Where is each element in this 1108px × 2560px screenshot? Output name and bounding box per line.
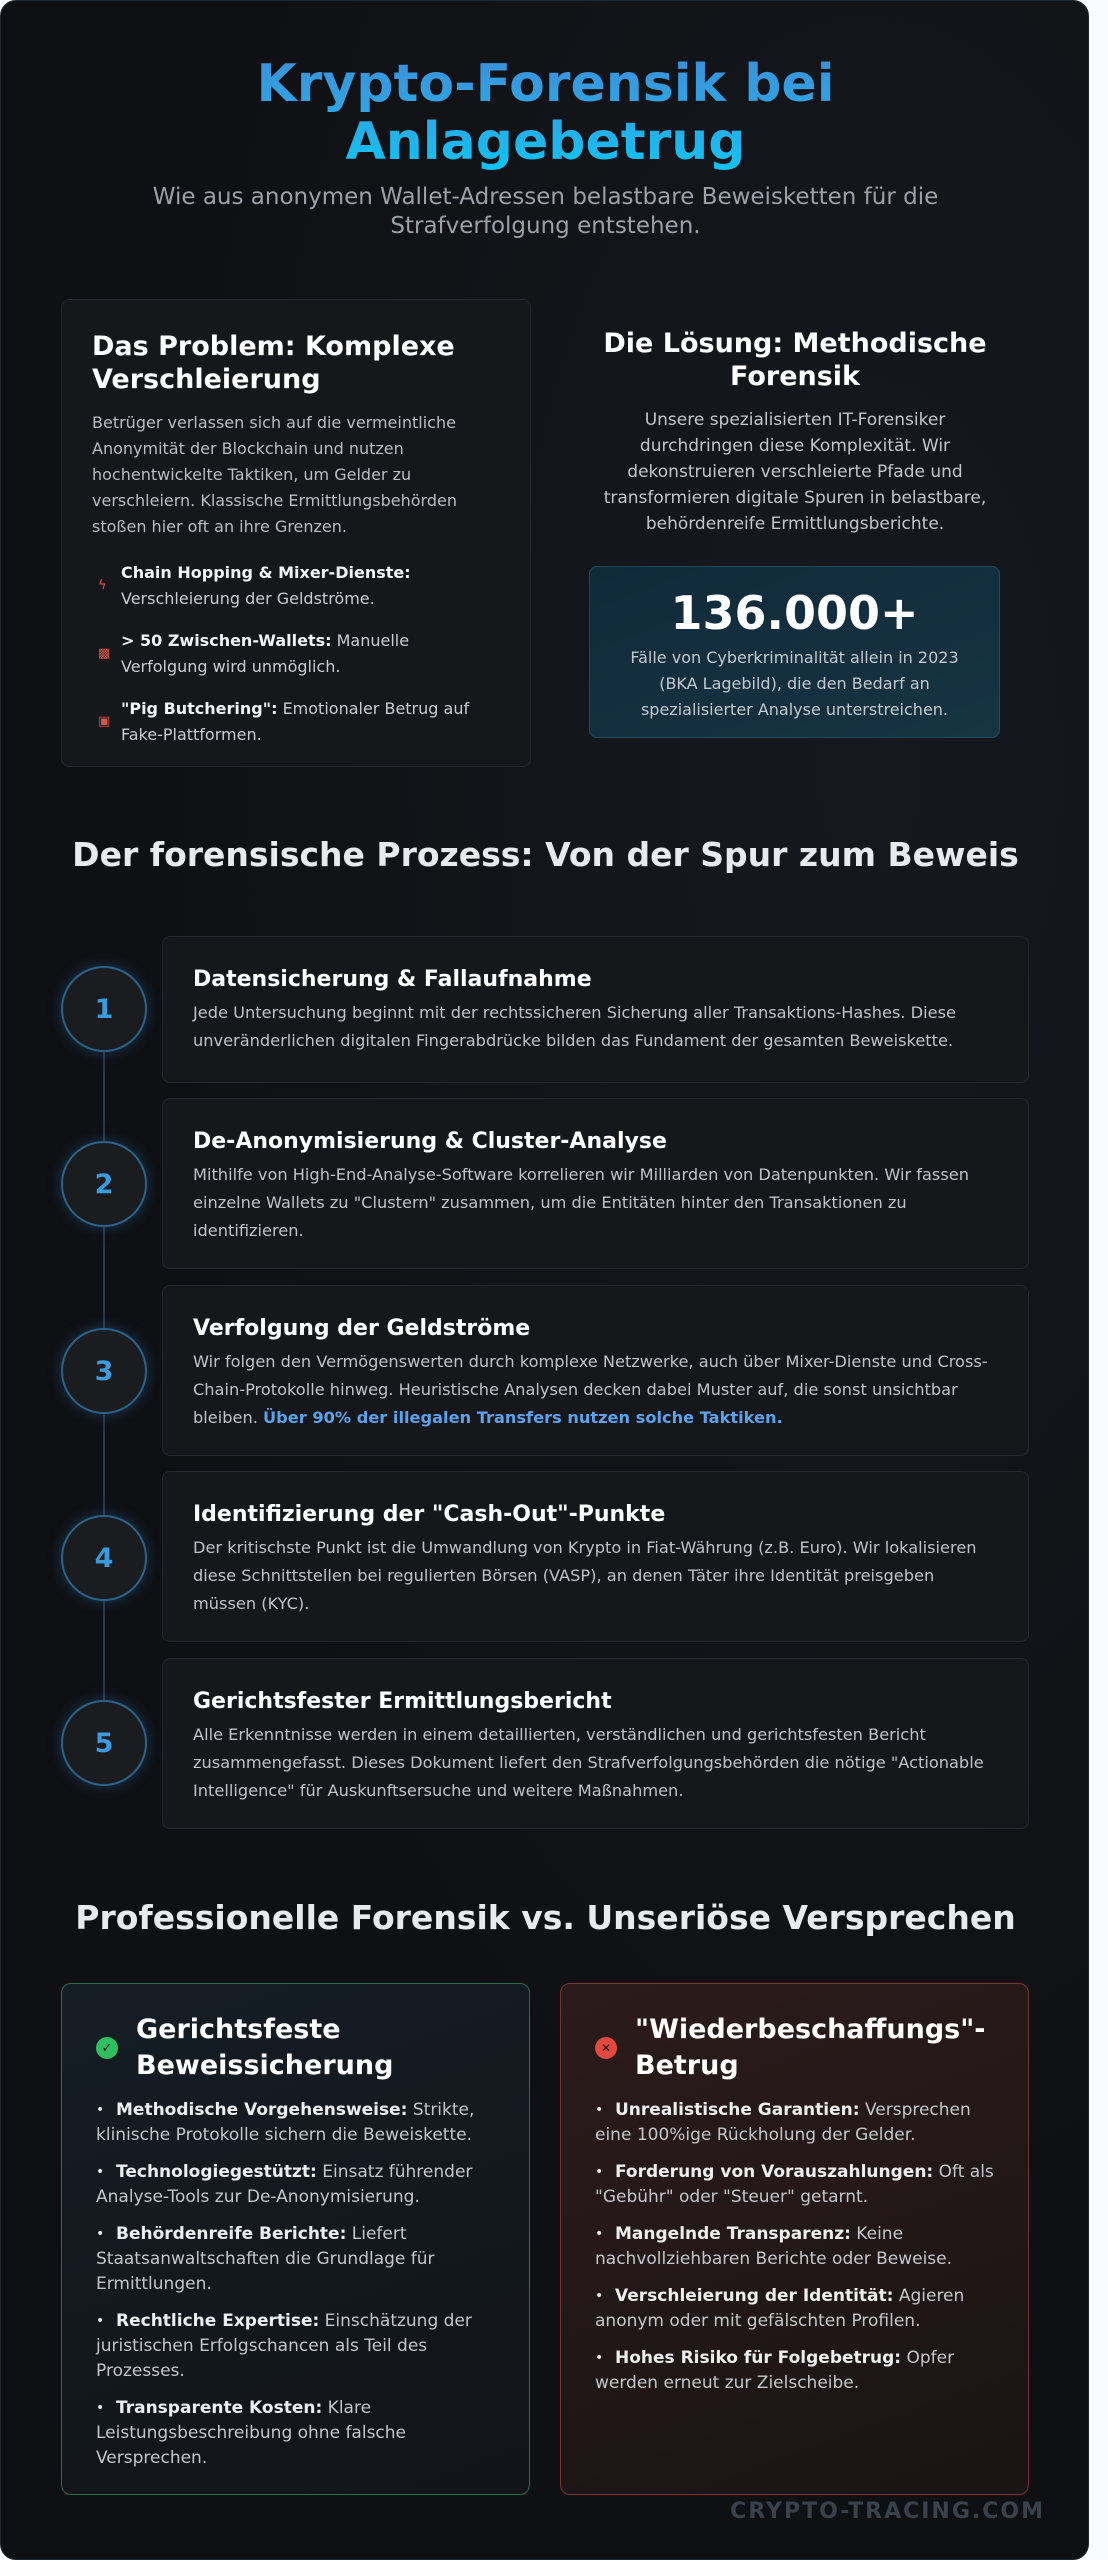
step 5 [54, 1658, 1029, 1829]
circle 1: 1 [95, 994, 113, 1024]
item: chain hopping: ϟ [98, 578, 107, 593]
circle 3: 3 [95, 1356, 113, 1386]
card 4: Identifizierung der "Cash-Out"-Punkte [193, 1502, 665, 1527]
item: chain hopping: Chain Hopping & Mixer-Dienste: Verschleierung der Geldströme. [121, 563, 411, 608]
card 5: Gerichtsfester Ermittlungsbericht [193, 1689, 612, 1714]
professional list: Rechtliche Expertise: Einschätzung der juristischen Erfolgschancen als Teil des Prozesses. [96, 2311, 472, 2381]
title: Anlagebetrug [346, 112, 745, 172]
title: Krypto-Forensik bei [256, 54, 835, 114]
title [1, 55, 1090, 171]
card 1: Jede Untersuchung beginnt mit der rechtssicheren Sicherung aller Transaktions-Hashes. Diese unveränderlichen digitalen Fingerabdrücke bilden das Fundament der gesamten Beweiskette. [193, 1003, 956, 1050]
item: pig butchering: "Pig Butchering": Emotionaler Betrug auf Fake-Plattformen. [121, 699, 469, 744]
card 4: Der kritischste Punkt ist die Umwandlung von Krypto in Fiat-Währung (z.B. Euro). Wir lokalisieren diese Schnittstellen bei regulierten Börsen (VASP), an denen Täter ihre Identität preisgeben müssen (KYC). [193, 1538, 977, 1613]
stat box [589, 566, 1000, 738]
stat number: 136.000+ [670, 586, 919, 640]
panel: professional [61, 1983, 530, 2495]
icon: check [96, 2037, 118, 2059]
panel: solution [603, 328, 987, 534]
card 2: Mithilfe von High-End-Analyse-Software korrelieren wir Milliarden von Datenpunkten. Wir fassen einzelne Wallets zu "Clustern" zusammen, um die Entitäten hinter den Transaktionen zu identifizieren. [193, 1165, 969, 1240]
fraud list: Mangelnde Transparenz: Keine nachvollziehbaren Berichte oder Beweise. [595, 2224, 952, 2269]
step 1 [54, 936, 1029, 1083]
fraud list: Verschleierung der Identität: Agieren anonym oder mit gefälschten Profilen. [595, 2286, 964, 2331]
problem items [98, 563, 470, 744]
professional list: Technologiegestützt: Einsatz führender Analyse-Tools zur De-Anonymisierung. [96, 2162, 472, 2207]
card 3: Verfolgung der Geldströme [193, 1316, 530, 1341]
circle 4: 4 [95, 1542, 113, 1574]
fraud list: Forderung von Vorauszahlungen: Oft als "Gebühr" oder "Steuer" getarnt. [595, 2162, 994, 2207]
heading with check icon: Gerichtsfeste Beweissicherung [136, 2014, 393, 2081]
section heading: comparison: Professionelle Forensik vs. Unseriöse Versprechen [75, 1898, 1016, 1937]
card 5 [162, 1658, 1029, 1829]
timeline line [103, 1011, 105, 1746]
fraud list: Unrealistische Garantien: Versprechen eine 100%ige Rückholung der Gelder. [595, 2100, 971, 2145]
panel: fraud [560, 1983, 1029, 2495]
circle 5: 5 [95, 1728, 113, 1758]
heading with x icon: "Wiederbeschaffungs"-Betrug [635, 2014, 986, 2081]
professional list: Transparente Kosten: Klare Leistungsbeschreibung ohne falsche Versprechen. [96, 2398, 406, 2468]
card 3: Wir folgen den Vermögenswerten durch komplexe Netzwerke, auch über Mixer-Dienste und Cross-Chain-Protokolle hinweg. Heuristische Analysen decken dabei Muster auf, die sonst unsichtbar bleiben. Über 90% der illegalen Transfers nutzen solche Taktiken. [193, 1352, 988, 1427]
card 5: Alle Erkenntnisse werden in einem detaillierten, verständlichen und gerichtsfesten Bericht zusammengefasst. Dieses Dokument liefert den Strafverfolgungsbehörden die nötige "Actionable Intelligence" für Auskunftsersuche und weitere Maßnahmen. [193, 1725, 984, 1800]
item: pig butchering: ▣ [98, 714, 110, 729]
fraud list [595, 2100, 994, 2393]
step 4 [54, 1471, 1029, 1642]
fraud list: Hohes Risiko für Folgebetrug: Opfer werden erneut zur Zielscheibe. [595, 2348, 954, 2393]
icon: check: ✓ [102, 2040, 112, 2056]
circle 4 [61, 1515, 147, 1601]
circle 2: 2 [95, 1168, 113, 1200]
card 2 [162, 1098, 1029, 1269]
footer brand: CRYPTO-TRACING.COM [730, 2499, 1045, 2524]
icon: cross [595, 2037, 617, 2059]
problem text: Betrüger verlassen sich auf die vermeintliche Anonymität der Blockchain und nutzen hochentwickelte Taktiken, um Gelder zu verschleiern. Klassische Ermittlungsbehörden stoßen hier oft an ihre Grenzen. [92, 413, 457, 536]
card 3 [162, 1285, 1029, 1456]
step 2 [54, 1098, 1029, 1269]
professional list: Behördenreife Berichte: Liefert Staatsanwaltschaften die Grundlage für Ermittlungen. [96, 2224, 435, 2294]
item: wallets: ▩ [98, 646, 110, 661]
card 1 [162, 936, 1029, 1083]
stat caption: Fälle von Cyberkriminalität allein in 2023 (BKA Lagebild), die den Bedarf an spezialisierter Analyse unterstreichen. [630, 648, 959, 719]
solution text: Unsere spezialisierten IT-Forensiker durchdringen diese Komplexität. Wir dekonstruieren verschleierte Pfade und transformieren digitale Spuren in belastbare, behördenreife Ermittlungsberichte. [604, 410, 986, 534]
solution heading: Die Lösung: Methodische Forensik [603, 328, 987, 392]
icon: cross: ✕ [601, 2041, 611, 2055]
circle 5 [61, 1700, 147, 1786]
step 3 [54, 1285, 1029, 1456]
card 4 [162, 1471, 1029, 1642]
professional list: Methodische Vorgehensweise: Strikte, klinische Protokolle sichern die Beweiskette. [96, 2100, 474, 2145]
problem heading: Das Problem: Komplexe Verschleierung [92, 331, 455, 395]
section heading: process: Der forensische Prozess: Von der Spur zum Beweis [72, 835, 1019, 874]
subtitle: Wie aus anonymen Wallet-Adressen belastbare Beweisketten für die Strafverfolgung entstehen. [153, 184, 938, 239]
circle 3 [61, 1328, 147, 1414]
circle 1 [61, 966, 147, 1052]
item: wallets: > 50 Zwischen-Wallets: Manuelle Verfolgung wird unmöglich. [121, 631, 409, 676]
professional list [96, 2100, 474, 2468]
card 2: De-Anonymisierung & Cluster-Analyse [193, 1129, 667, 1154]
card 1: Datensicherung & Fallaufnahme [193, 967, 592, 992]
panel: problem [61, 299, 531, 767]
circle 2 [61, 1141, 147, 1227]
